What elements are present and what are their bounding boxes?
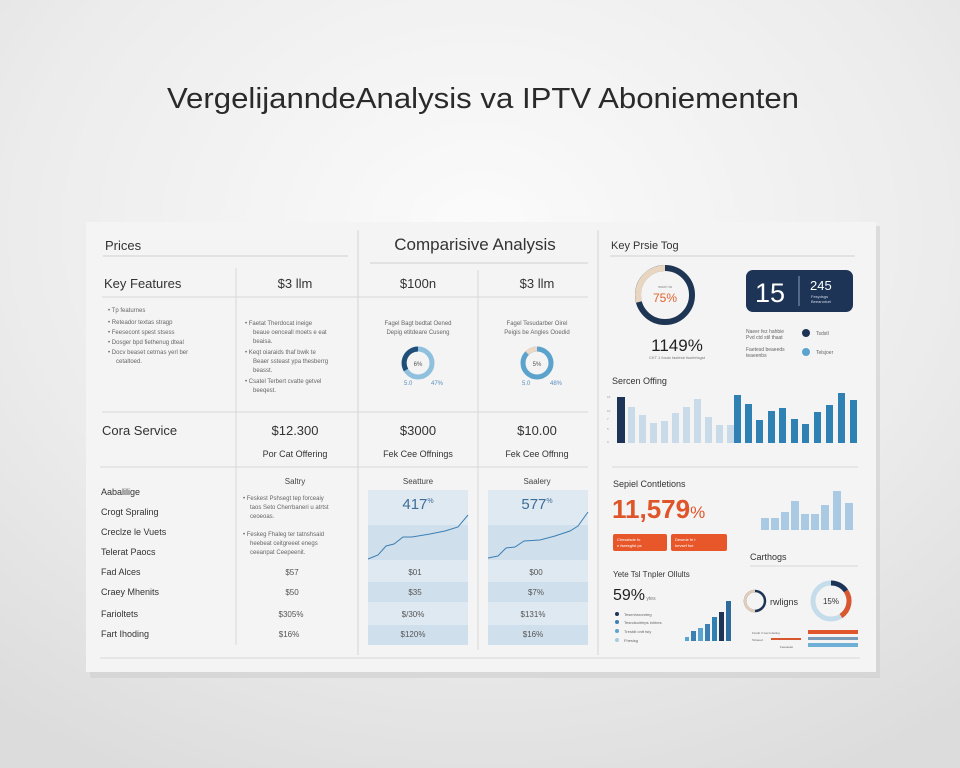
chart panel col3: % [427,498,434,505]
bar chart: 5 [607,427,609,431]
row labels: Aabalilige [101,487,140,497]
small donut: rwligns [770,597,799,607]
row: core service: Cora Service [102,423,177,438]
orange callouts: bevsef foe [675,543,694,548]
big stat: 11,579% [612,494,705,524]
heading: connections: Sepiel Contletions [613,479,686,489]
donut 75% [638,268,692,322]
legend list [615,612,662,643]
bullets left: cetaltoed. [116,359,142,365]
row: key features: $3 llm [278,276,312,291]
row labels: Telerat Paocs [101,547,156,557]
horizontal bars: Feesaelel [780,645,793,649]
bullets col2: Beaer ssteast ypa thesberrg [253,359,328,365]
row values: $50 [285,588,299,597]
horizontal bars: Tebeted [752,638,763,642]
col4 text + donut: 48% [550,381,563,387]
donut 15%: 15% [823,597,839,606]
bar chart small [685,601,731,641]
legend: Tsdstl [816,331,829,337]
panel: prices table: Fek Cee Offnings [383,449,453,459]
legend [746,329,834,359]
legend: Naeer fez hahbie [746,329,784,335]
panel: prices table: Fek Cee Offnng [505,449,569,459]
bullets left [108,308,188,365]
col2 bullets bottom: • Feskeg Fhaleg ter tatnshsaid [243,532,324,538]
bar chart: 7 [607,417,609,421]
small donut [745,591,799,611]
row labels: Fart Ihoding [101,629,149,639]
stat 1149%: CKT 1 fosdc fasfesb fsseletsgst [649,355,706,360]
row: key features [104,276,554,291]
heading: Key Prsie Tog [611,240,679,252]
bullets col2: • Keqt oiaraids thaf bwik te [245,350,316,356]
bullets col2: • Csatel Terbert cvatte getvel [245,379,321,385]
heading: outputs: Yete Tsl Tnpler Ollults [613,570,690,579]
orange callouts [613,534,727,551]
legend list: Tesndsoirfeps inhbes [624,620,662,625]
col4 text + donut: 5.0 [522,381,531,387]
bullets col2: • Faetat Therdocat ineige [245,321,313,327]
legend list: Tesenhsronrteg [624,612,652,617]
chart panel col3: 417 [402,496,427,513]
stat 59%: 59% ytes [613,587,656,604]
panel: prices table: Por Cat Offering [263,449,327,459]
row: key features: Key Features [104,276,182,291]
col2 bullets bottom: taos Seto Cherrbaneri u atrtst [250,505,329,511]
legend list: Trestdt ontt tsiy [624,629,651,634]
subheads: Saltry [285,477,305,486]
subheads: Saalery [523,477,551,486]
row values: $01 [408,568,422,577]
chart panel col4: 577 [521,496,546,513]
col3 text + donut [384,321,452,387]
row values: $7% [528,588,544,597]
legend list: Fhesisg [624,638,638,643]
row values: $00 [529,568,543,577]
donut 75%: 75% [653,291,677,305]
col4 text + donut: 5% [533,362,542,368]
bullets left: • Dosger bpd fiethenug dteal [108,340,184,346]
chart panel col4 [488,490,588,645]
row values: $35 [408,588,422,597]
bar chart: 10 [607,409,611,413]
bullets col2: beeqest. [253,388,276,394]
row values: $131% [521,610,545,619]
col2 bullets bottom: ceeanpat Ceepeenit. [250,550,306,556]
row values: $16% [523,630,543,639]
orange callouts: e fseesgfst ps [617,543,642,548]
bullets left: • Feesecont spest stsess [108,330,174,336]
row labels [101,487,167,639]
panel: prices table [100,235,588,645]
horizontal bars [752,630,858,649]
heading: carthogs: Carthogs [750,552,787,562]
col3 text + donut: Depig etitdeare Cuseng [386,330,450,336]
bar chart: 0 [607,440,609,444]
row values: $/30% [402,610,424,619]
donut 75%: wsuh ta [658,284,673,289]
chart panel col3 [368,490,468,645]
col3 text + donut: 6% [414,362,423,368]
col3 text + donut: 47% [431,381,444,387]
bullets col2: beaue oenceall moets e eat [253,330,327,336]
heading: prices: Prices [105,238,142,253]
bullets col2: beasst. [253,368,273,374]
row: core service: $3000 [400,423,436,438]
row values: $305% [279,610,303,619]
navy box [746,270,853,312]
bullets left: • Tp featurnes [108,308,145,314]
row: core service: $12.300 [272,423,318,438]
col3 text + donut: Fagel Bagt bedtat Oened [384,321,452,327]
row: core service: $10.00 [517,423,557,438]
row labels: Craey Mhenits [101,587,160,597]
stat 1149%: 1149% [651,336,703,355]
col4 text + donut: Fagel Tesudarber Oirel [507,321,567,327]
legend: Faetesd beaeeds [746,347,785,353]
navy box: 245 [810,278,832,293]
row labels: Farioltets [101,609,139,619]
row values [279,568,545,639]
row values: $120% [401,630,425,639]
heading: offering: Sercen Offing [612,376,667,386]
panel: key stats [607,240,858,649]
row labels: Fad Alces [101,567,141,577]
col4 text + donut [504,321,570,387]
navy box: Fesydsgs [811,294,828,299]
small bar chart [761,491,853,530]
row labels: Creclze le Vuets [101,527,167,537]
orange callouts: Desede fe t [675,537,696,542]
col2 bullets bottom: • Feskest Pshsegt tep forceaiy [243,496,324,502]
col3 text + donut: 5.0 [404,381,413,387]
donut 15% [813,583,849,619]
bullets left: • Reteador textas stragp [108,320,173,326]
legend: teaeenbs [746,353,767,359]
subheads [285,477,551,486]
bullets col2: beaisa. [253,339,273,345]
board [86,222,880,678]
row: core service [102,423,557,438]
col2 bullets bottom: ceoeoas. [250,514,275,520]
bar chart [607,393,857,444]
row labels: Crogt Spraling [101,507,159,517]
row values: $16% [279,630,299,639]
bar chart: 15 [607,395,611,399]
row: key features: $100n [400,276,436,291]
row values: $57 [285,568,299,577]
orange callouts: Chesstsde fo [617,537,641,542]
col2 bullets bottom [243,496,329,556]
horizontal bars: Fssnb tr txet Iobeling [752,631,780,635]
subheads: Seatture [403,477,434,486]
title: VergelijanndeAnalysis va IPTV Aboniementen [167,83,799,115]
chart panel col4: % [546,498,553,505]
legend: Telsjoer [816,350,834,356]
col4 text + donut: Peigis be Angles Ooedid [504,330,570,336]
bullets col2 [245,321,328,394]
navy box: 15 [755,278,785,308]
heading: comparative analysis: Comparisive Analysis [394,235,556,254]
navy box: Beeanotcel [811,299,831,304]
legend: Pvd ctd stil thaat [746,335,783,341]
row: key features: $3 llm [520,276,554,291]
bullets left: • Docv beaset cetrnas yerl ber [108,350,188,356]
col2 bullets bottom: heebeat ceitgreeet enegs [250,541,318,547]
